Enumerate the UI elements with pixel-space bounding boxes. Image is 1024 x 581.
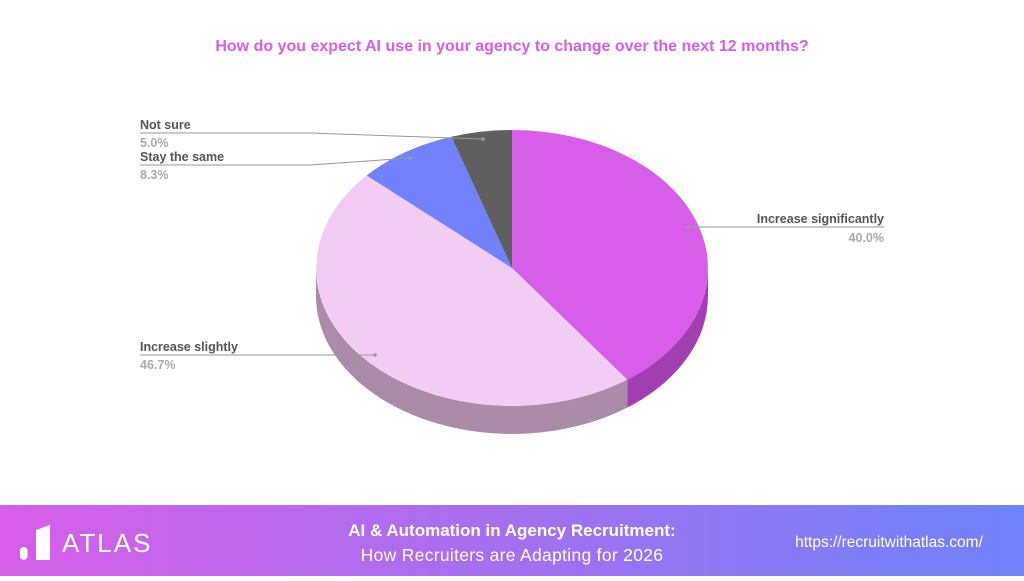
label: stay the same <box>140 150 224 182</box>
footer bar: How Recruiters are Adapting for 2026 <box>361 545 663 565</box>
label: stay the same: 8.3% <box>140 168 168 182</box>
label: increase significantly: Increase significantly <box>757 212 884 226</box>
url: https://recruitwithatlas.com/ <box>795 534 984 551</box>
label: increase significantly: 40.0% <box>849 231 884 245</box>
footer bar <box>0 505 1024 576</box>
logo icon <box>20 525 50 560</box>
label: not sure: Not sure <box>140 118 191 132</box>
label: not sure <box>140 118 191 150</box>
label: increase slightly: Increase slightly <box>140 340 238 354</box>
title: How do you expect AI use in your agency to change over the next 12 months? <box>215 38 809 55</box>
label: increase slightly: 46.7% <box>140 358 175 372</box>
footer title: AI & Automation in Agency Recruitment: <box>348 521 676 540</box>
label: not sure: 5.0% <box>140 136 168 150</box>
leader lines <box>140 133 884 355</box>
label: stay the same: Stay the same <box>140 150 224 164</box>
label: increase significantly <box>757 212 884 245</box>
pie chart <box>316 130 708 434</box>
logo text: ATLAS <box>62 528 152 558</box>
label: increase slightly <box>140 340 238 372</box>
